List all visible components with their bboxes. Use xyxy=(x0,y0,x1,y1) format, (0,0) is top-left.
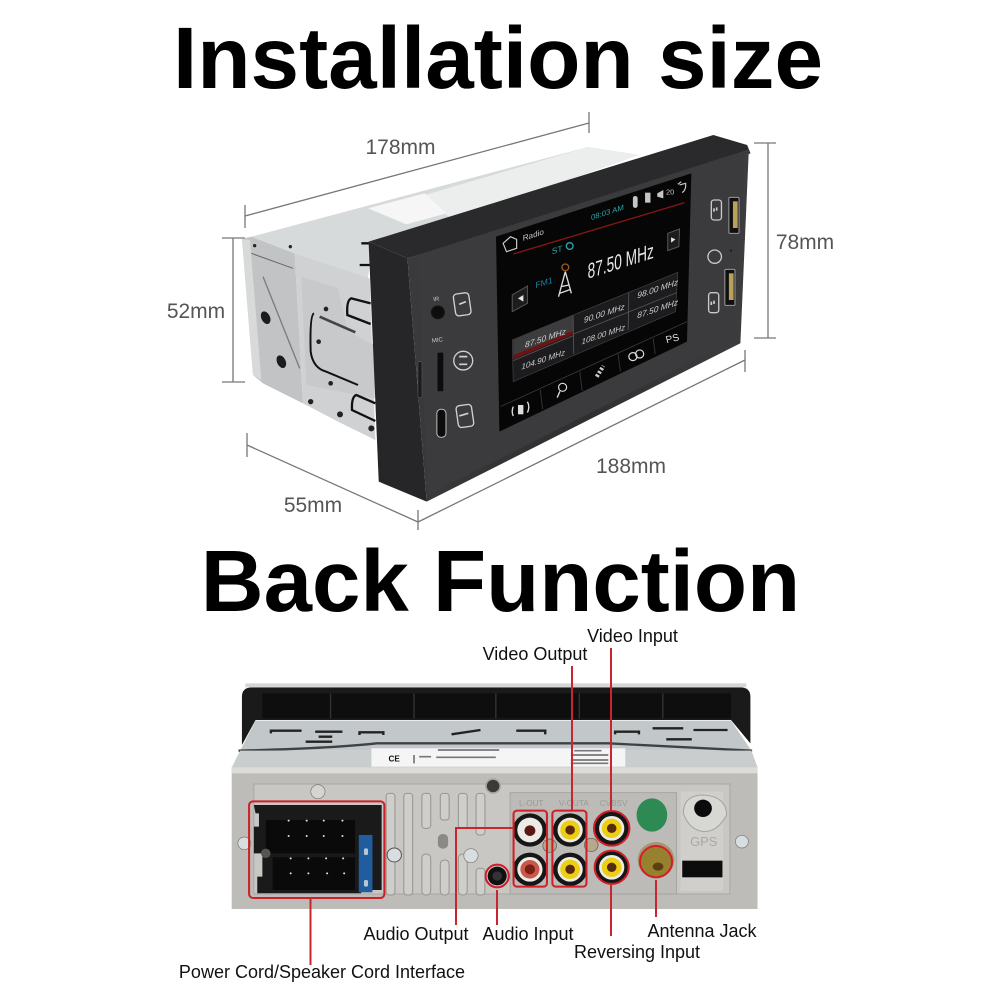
product photo: car radio faceplate xyxy=(369,135,751,502)
leader line: audio output xyxy=(456,828,513,925)
dimension: 188mm: 188mm xyxy=(596,455,666,478)
audio output jacks xyxy=(513,813,547,886)
GPS socket: GPS xyxy=(690,834,717,849)
bottom menu xyxy=(500,322,687,416)
green sticker xyxy=(637,798,667,832)
preset buttons: 108.00 MHz xyxy=(582,323,626,346)
status bar red line xyxy=(513,203,685,254)
dimension: 55mm: 55mm xyxy=(284,494,342,517)
top cover plate xyxy=(232,721,758,767)
status icons xyxy=(633,190,663,208)
label: Antenna Jack: Antenna Jack xyxy=(647,921,758,941)
panel labels: CVBSV xyxy=(600,799,628,808)
touch screen: 20 xyxy=(666,187,674,196)
red highlight boxes xyxy=(249,801,672,898)
wiring connector with fuse xyxy=(254,805,382,893)
label: Audio Input: Audio Input xyxy=(482,924,574,944)
leader line: power cord xyxy=(310,898,312,965)
home icon xyxy=(503,237,517,252)
clock: 08:03 AM xyxy=(591,203,624,222)
CD indicator xyxy=(566,243,573,249)
frequency: 87.50 MHz xyxy=(588,239,654,284)
vent slots xyxy=(386,793,485,895)
sticker xyxy=(371,748,625,767)
leader line: video input xyxy=(610,648,612,810)
label: Video Output: Video Output xyxy=(483,644,587,664)
dimension: 178mm xyxy=(245,112,589,228)
video output jacks xyxy=(553,813,587,886)
bottom menu: PS xyxy=(665,332,681,346)
panel labels: L-OUT xyxy=(519,799,544,808)
leader line: antenna jack xyxy=(655,880,657,917)
dimension: 52mm: 52mm xyxy=(167,300,225,323)
preset buttons: 104.90 MHz xyxy=(521,348,566,372)
dimension: 178mm: 178mm xyxy=(365,136,436,159)
leader line: reversing input xyxy=(610,885,612,936)
leader line: video output xyxy=(571,666,573,810)
preset buttons xyxy=(512,272,679,382)
panel labels xyxy=(519,799,628,808)
faceplate side xyxy=(369,242,427,502)
title: Installation size: Installation size xyxy=(173,9,823,107)
product photo: car radio rear view xyxy=(232,683,758,909)
preset buttons: 98.00 MHz xyxy=(637,277,679,300)
preset buttons: 87.50 MHz xyxy=(525,326,567,350)
panel labels: V-OUTA xyxy=(559,799,589,808)
dimension: 52mm xyxy=(167,238,245,382)
labels IR MIC xyxy=(432,296,444,345)
ST: ST xyxy=(552,243,563,256)
labels IR MIC: IR xyxy=(433,296,440,303)
leader line: audio input xyxy=(496,890,498,925)
dimension: 78mm: 78mm xyxy=(776,231,834,254)
chassis top xyxy=(251,147,639,278)
rear panel xyxy=(232,767,758,909)
touch screen xyxy=(496,173,691,432)
Radio label: Radio xyxy=(523,227,544,243)
nav arrows xyxy=(512,286,527,312)
GPS socket xyxy=(682,795,727,877)
top cover plate: CE xyxy=(388,754,400,763)
dimension: 188mm xyxy=(418,350,745,522)
FM1: FM1 xyxy=(535,275,553,290)
preset buttons: 90.00 MHz xyxy=(584,301,625,325)
right controls xyxy=(708,197,739,313)
left controls xyxy=(418,292,474,437)
label: Power Cord/Speaker Cord Interface: Power Cord/Speaker Cord Interface xyxy=(179,962,465,982)
label: Audio Output: Audio Output xyxy=(363,924,469,944)
label: Reversing Input: Reversing Input xyxy=(574,942,700,962)
reversing input jack xyxy=(595,851,629,884)
faceplate top xyxy=(369,135,751,258)
chassis side front panel xyxy=(295,253,375,440)
screws xyxy=(238,779,748,863)
video input jack xyxy=(595,812,629,845)
tower icon xyxy=(559,272,571,297)
audio input jack xyxy=(488,867,507,885)
dimension: 55mm xyxy=(247,433,418,530)
preset buttons: 87.50 MHz xyxy=(637,297,679,320)
chassis side rear panel xyxy=(242,237,303,403)
antenna jack xyxy=(638,842,674,878)
rear bezel xyxy=(242,683,750,745)
labels IR MIC: MIC xyxy=(432,337,444,345)
title: Back Function: Back Function xyxy=(201,533,800,630)
label: Video Input: Video Input xyxy=(587,626,678,646)
faceplate front xyxy=(407,149,749,502)
dimension: 78mm xyxy=(754,143,834,338)
product photo: car radio metal chassis xyxy=(242,147,639,440)
